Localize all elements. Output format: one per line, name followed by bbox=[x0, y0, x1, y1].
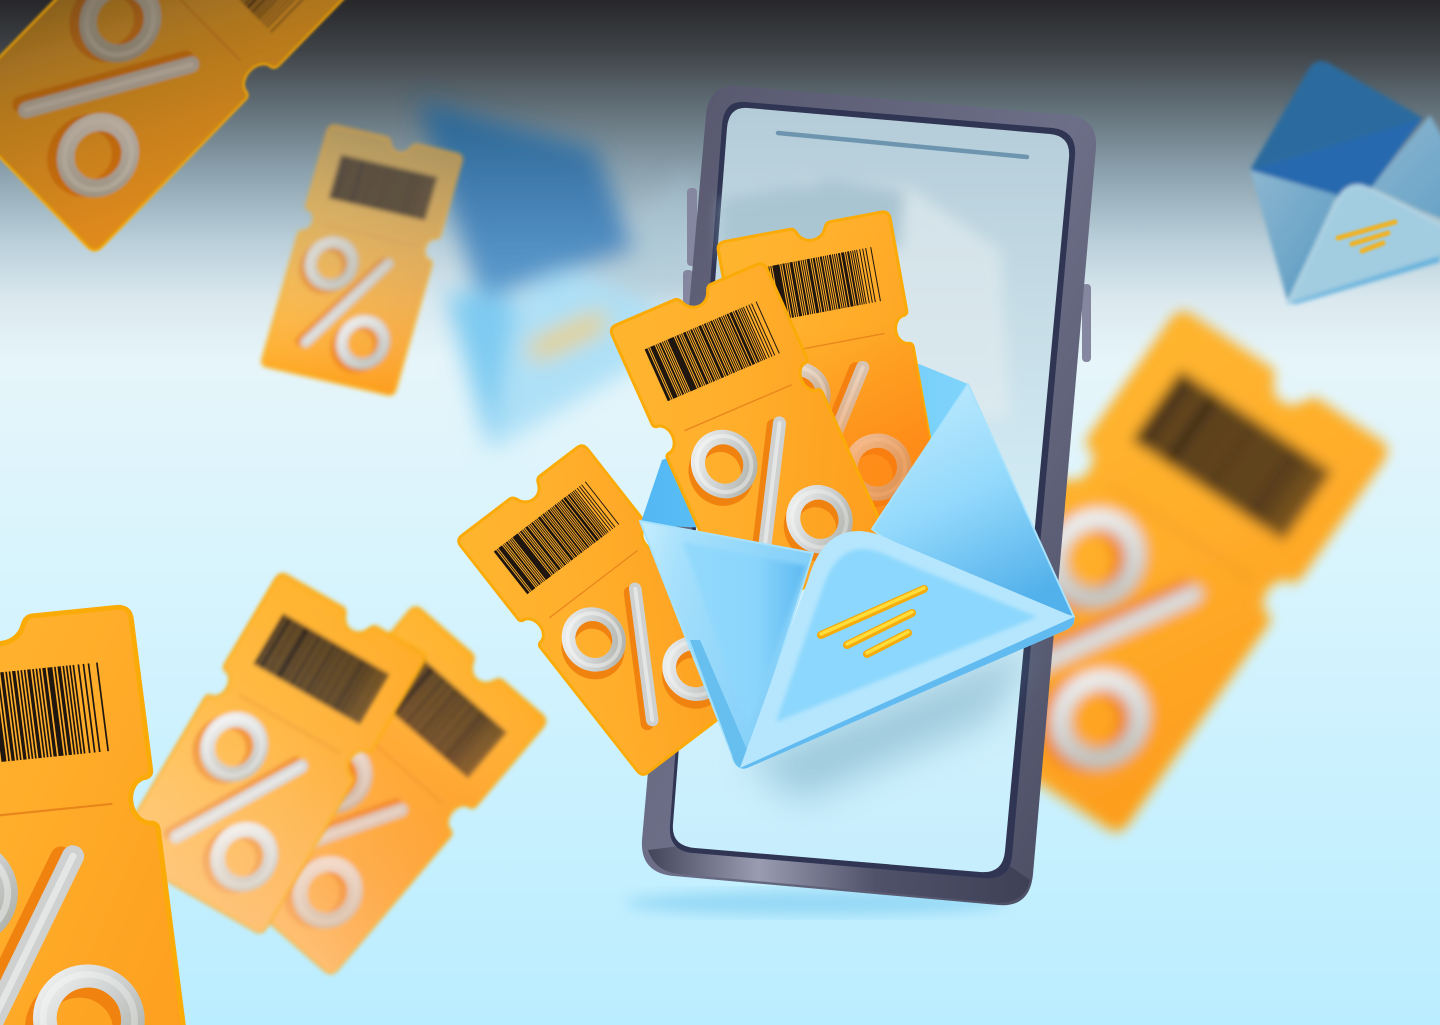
small envelope back flap bbox=[1250, 61, 1423, 170]
pale right flap bbox=[560, 170, 705, 300]
envelope front flap outer band bbox=[740, 531, 1074, 769]
smartphone bbox=[642, 86, 1096, 905]
envelope left flap panel bbox=[683, 542, 806, 728]
envelope yellow lines bbox=[821, 588, 924, 654]
small envelope right panel bbox=[1372, 115, 1440, 240]
blurred ticket: top left bbox=[0, 0, 369, 253]
blurred envelope: top centre bbox=[418, 100, 705, 450]
envelope flap bbox=[418, 100, 635, 300]
envelope left flap bbox=[640, 521, 813, 768]
envelope left panel bbox=[445, 290, 520, 450]
small envelope yellow lines bbox=[1338, 222, 1395, 251]
envelope left outer edge bbox=[690, 640, 748, 768]
phone bezel bbox=[670, 102, 1075, 878]
envelope: top right bbox=[1250, 61, 1440, 304]
blurred ticket: top centre bbox=[261, 125, 463, 396]
blurred ticket: large right bbox=[910, 310, 1389, 833]
ticket: bottom left foreground bbox=[0, 606, 193, 1025]
envelope front panel bbox=[490, 273, 700, 450]
coupon ticket: back bbox=[717, 211, 943, 543]
envelope lines bbox=[538, 322, 598, 350]
blurred ticket: bottom left front bbox=[115, 572, 427, 934]
small envelope front panel bbox=[1288, 186, 1440, 303]
envelope interior bbox=[640, 364, 968, 535]
phone screen bbox=[673, 108, 1069, 872]
phone side buttons bbox=[683, 188, 1091, 362]
phone body bbox=[642, 86, 1096, 905]
small envelope left panel bbox=[1250, 170, 1337, 303]
blurred ticket: bottom left back bbox=[199, 605, 548, 976]
envelope front flap panel bbox=[776, 549, 1037, 722]
envelope: centre bbox=[640, 384, 1074, 769]
screen top status line bbox=[778, 133, 1027, 157]
envelope shadow on the screen bbox=[745, 640, 1040, 800]
small envelope interior bbox=[1250, 118, 1423, 197]
small envelope lower edge bbox=[1288, 256, 1440, 304]
coupon ticket: front bbox=[609, 262, 893, 616]
phone ground shadow bbox=[625, 891, 1005, 915]
coupon ticket: left bbox=[456, 443, 769, 777]
envelope front flap lower edge bbox=[740, 617, 1074, 769]
phone bottom edge highlight bbox=[648, 846, 1030, 903]
blurred reflections on the screen bbox=[720, 180, 1010, 420]
envelope right flap bbox=[872, 384, 1074, 617]
